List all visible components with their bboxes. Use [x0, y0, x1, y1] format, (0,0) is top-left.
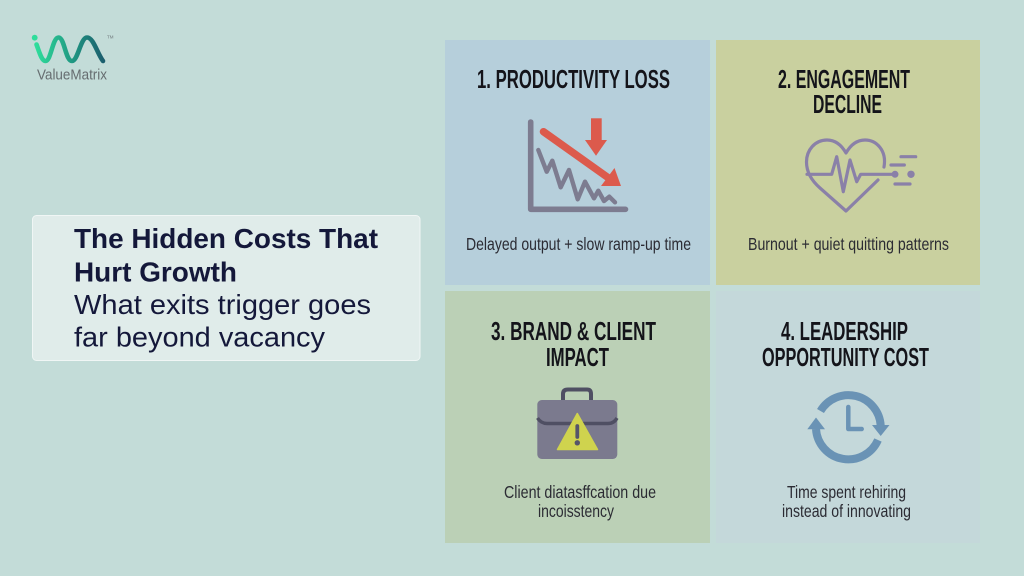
heading: 2. Engagement Decline: DECLINE	[813, 89, 882, 119]
heading: 3. Brand & Client Impact: 3. BRAND & CLIENT	[491, 316, 656, 346]
heading: The Hidden Costs That Hurt Growth	[74, 223, 378, 288]
heading: 2. Engagement Decline	[778, 64, 910, 119]
heading: 2. Engagement Decline: 2. ENGAGEMENT	[778, 64, 910, 94]
heading: The Hidden Costs That Hurt Growth: The Hidden Costs That	[74, 223, 378, 254]
logo: ValueMatrix: TM	[107, 34, 114, 40]
heading: 1. Productivity Loss: 1. PRODUCTIVITY LOSS	[477, 64, 670, 94]
heading: 4. Leadership Opportunity Cost: 4. LEADERSHIP	[781, 316, 908, 346]
panel: engagement decline	[716, 40, 980, 285]
icon: briefcase with warning triangle	[537, 390, 617, 459]
description: Delayed output + slow ramp-up time	[466, 234, 691, 254]
icon: heart with pulse line	[806, 140, 916, 211]
panel: brand and client impact	[445, 291, 710, 543]
description: instead of innovating	[782, 501, 911, 521]
description: Time spent rehiring	[787, 482, 906, 502]
subheading: What exits trigger goes far beyond vacancy: What exits trigger goes	[74, 289, 371, 320]
heading: 4. Leadership Opportunity Cost: OPPORTUNITY COST	[762, 342, 929, 372]
heading: The Hidden Costs That Hurt Growth: Hurt Growth	[74, 257, 237, 288]
subheading: What exits trigger goes far beyond vacancy	[74, 289, 371, 353]
title card	[32, 216, 420, 360]
heading: 3. Brand & Client Impact	[491, 316, 656, 372]
panel: productivity loss	[445, 40, 710, 285]
description: Client diatasffcation due	[504, 482, 656, 502]
icon: clock with circular arrows	[807, 395, 890, 459]
heading: 4. Leadership Opportunity Cost	[762, 316, 929, 372]
description: Burnout + quiet quitting patterns	[748, 234, 949, 254]
logo: ValueMatrix	[32, 34, 114, 83]
heading: 3. Brand & Client Impact: IMPACT	[546, 342, 609, 372]
icon: falling chart with red arrows	[531, 118, 626, 209]
description	[504, 482, 656, 521]
subheading: What exits trigger goes far beyond vacancy: far beyond vacancy	[74, 322, 325, 353]
description	[782, 482, 911, 521]
panel: leadership opportunity cost	[716, 291, 980, 543]
description: incoisstency	[538, 501, 614, 521]
logo: ValueMatrix: ValueMatrix	[37, 67, 108, 83]
